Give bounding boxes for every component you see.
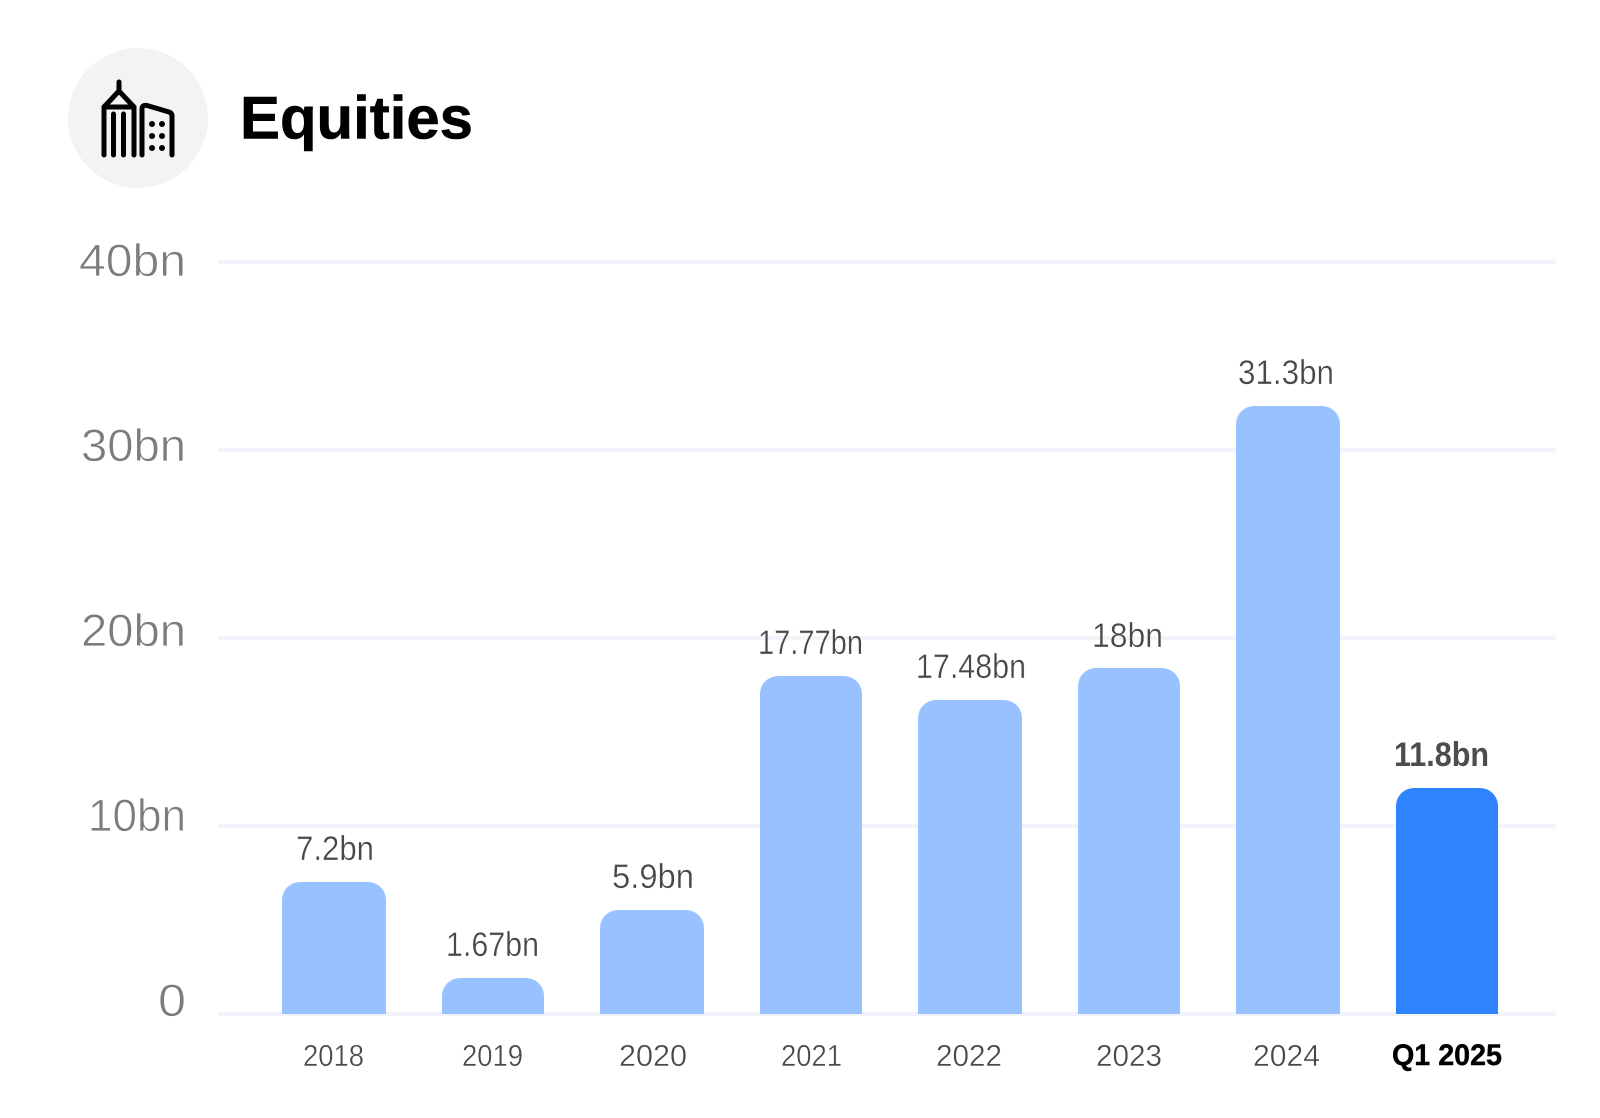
x axis labels: 2022 — [936, 1038, 1002, 1073]
value labels: 17.48bn — [916, 648, 1026, 686]
bar chart — [218, 260, 1556, 1016]
header — [68, 48, 473, 188]
y axis labels — [79, 235, 186, 1026]
value labels: 11.8bn — [1394, 736, 1489, 774]
y axis labels: 0 — [158, 975, 186, 1026]
y axis labels: 40bn — [79, 235, 186, 286]
bar: 2020 — [600, 910, 704, 1014]
value labels: 1.67bn — [446, 926, 539, 964]
x axis labels: Q1 2025 — [1392, 1039, 1502, 1072]
bar: 2021 — [760, 676, 862, 1014]
x axis labels — [303, 1038, 1502, 1073]
x axis labels: 2020 — [619, 1038, 687, 1073]
x axis labels: 2018 — [303, 1038, 364, 1073]
bar: 2019 — [442, 978, 544, 1014]
y axis labels: 30bn — [81, 420, 186, 471]
y axis labels: 20bn — [81, 605, 186, 656]
value labels: 18bn — [1092, 617, 1163, 655]
value labels: 5.9bn — [612, 858, 694, 896]
x axis labels: 2019 — [462, 1038, 523, 1073]
value labels: 7.2bn — [296, 830, 374, 868]
bar: Q1 2025 — [1396, 788, 1498, 1014]
value labels: 17.77bn — [758, 624, 863, 662]
bar: 2018 — [282, 882, 386, 1014]
bar: 2024 — [1236, 406, 1340, 1014]
bar: 2022 — [918, 700, 1022, 1014]
bar: 2023 — [1078, 668, 1180, 1014]
value labels — [296, 354, 1489, 964]
x axis labels: 2024 — [1253, 1038, 1320, 1073]
title: Equities — [240, 84, 473, 152]
x axis labels: 2021 — [781, 1038, 842, 1073]
icon: buildings in grey circle — [68, 48, 208, 188]
y axis labels: 10bn — [88, 790, 186, 841]
value labels: 31.3bn — [1238, 354, 1334, 392]
x axis labels: 2023 — [1096, 1038, 1162, 1073]
